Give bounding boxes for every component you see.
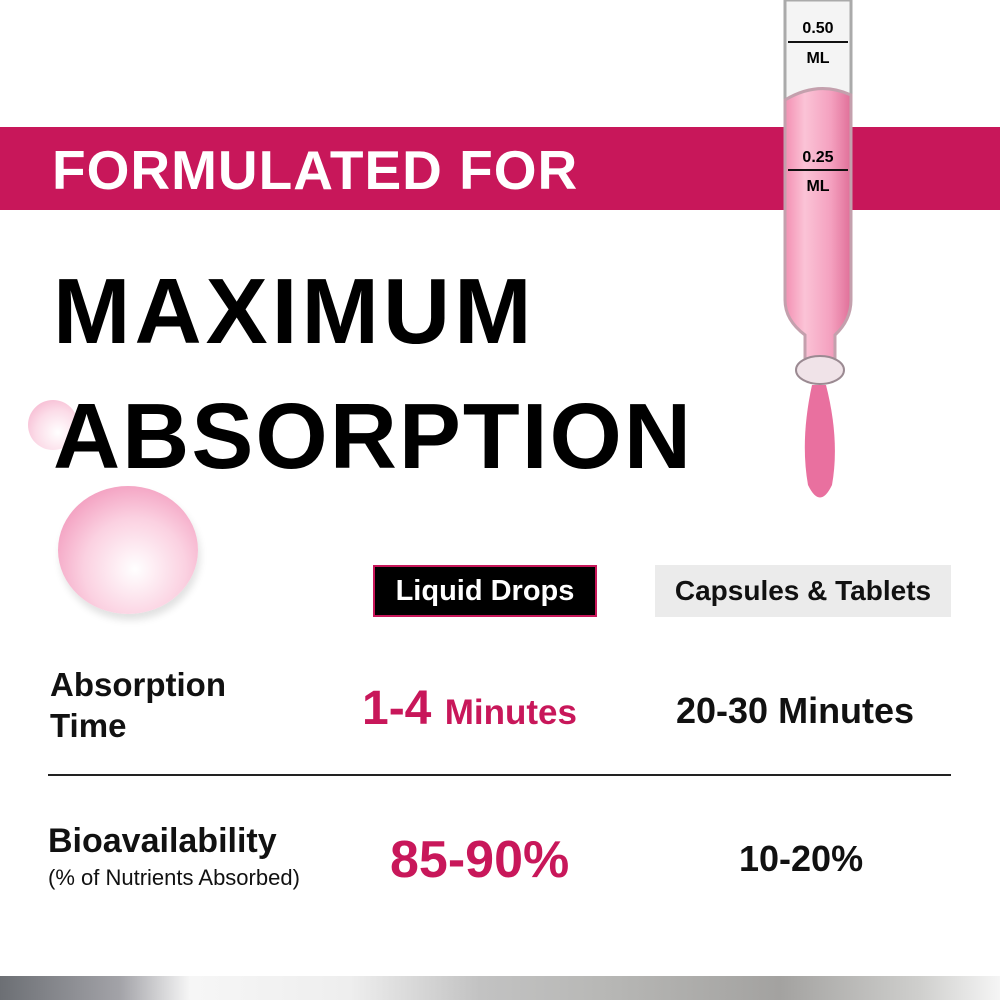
header: liquid drops <box>373 565 597 617</box>
value: 85-90%: 85-90% <box>390 831 569 889</box>
big bubble <box>58 486 198 614</box>
row label: bioavailability: Bioavailability <box>48 822 277 860</box>
header: capsules: Capsules & Tablets <box>675 575 931 606</box>
heading: MAXIMUM <box>53 259 536 363</box>
label 0.25 ML: 0.25 <box>802 149 834 166</box>
label 0.50 ML: ML <box>806 50 830 67</box>
value: 20-30 minutes: 20-30 Minutes <box>676 690 914 731</box>
heading: ABSORPTION <box>53 384 693 488</box>
label 0.50 ML: 0.50 <box>802 20 834 37</box>
banner <box>0 127 1000 210</box>
row label: absorption time <box>50 666 226 744</box>
small bubble <box>28 400 78 450</box>
row label: absorption time: Absorption <box>50 666 226 703</box>
dropper illustration <box>784 0 852 498</box>
row label: bioavailability: (% of Nutrients Absorbed) <box>48 865 300 890</box>
heading <box>53 259 693 488</box>
header: capsules <box>655 565 951 617</box>
label 0.25 ML <box>788 149 848 195</box>
banner title: FORMULATED FOR <box>52 139 578 201</box>
row label: absorption time: Time <box>50 707 126 744</box>
label 0.50 ML <box>788 20 848 67</box>
label 0.25 ML: ML <box>806 178 830 195</box>
row label: bioavailability <box>48 822 300 890</box>
header: liquid drops: Liquid Drops <box>396 575 574 607</box>
bottom metallic bar <box>0 976 1000 1000</box>
value: 1-4 minutes: 1-4 Minutes <box>362 682 577 735</box>
value: 10-20%: 10-20% <box>739 838 863 879</box>
